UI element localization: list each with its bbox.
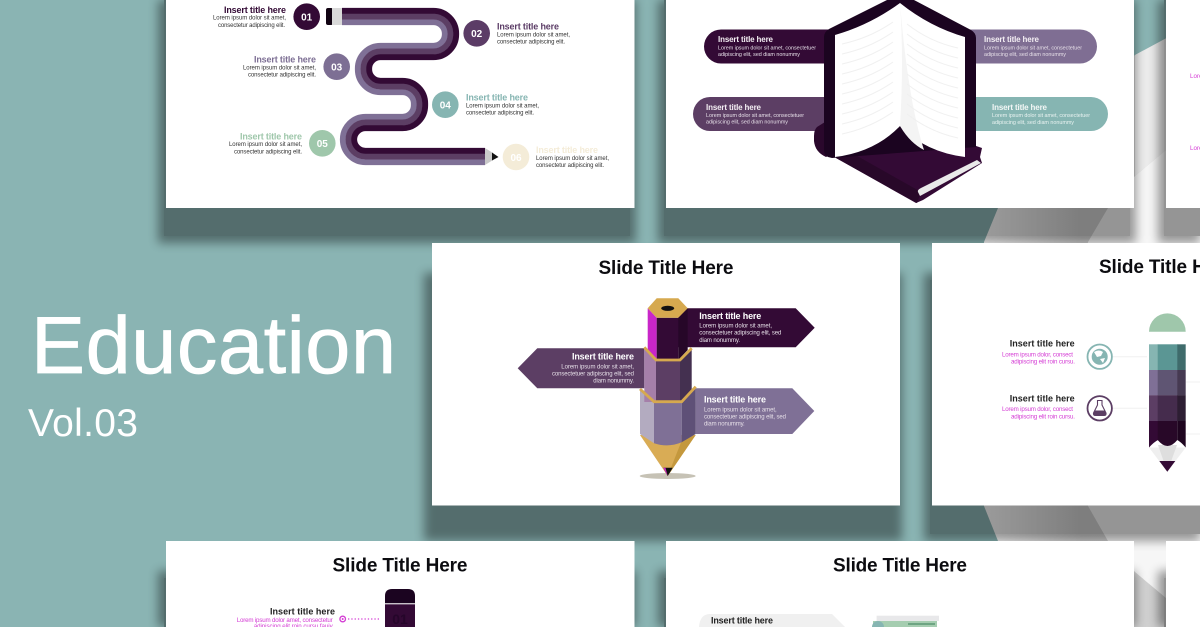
pill 4	[960, 97, 1108, 131]
pill 4: Lorem ipsum dolor sit amet, consectetuer	[992, 113, 1090, 119]
pill 4: Insert title here	[992, 103, 1048, 112]
panel: striped pencil slide	[932, 243, 1200, 506]
panel: snake pencil slide	[166, 0, 634, 208]
step 02	[463, 20, 570, 47]
arrow sign bottom right: Insert title here	[704, 395, 766, 405]
step 06: Insert title here	[536, 145, 598, 155]
pencil tip	[485, 148, 498, 165]
step 04	[432, 91, 539, 118]
arrow sign left: Lorem ipsum dolor sit amet,	[561, 364, 634, 370]
step 05: Lorem ipsum dolor sit amet,	[229, 142, 302, 148]
arrow sign top right: consectetuer adipiscing elit, sed	[699, 331, 781, 337]
pill 3: Lorem ipsum dolor sit amet, consectetuer	[706, 113, 804, 119]
step 06	[503, 144, 609, 170]
grey label pill	[699, 614, 845, 627]
step 05: 05	[317, 139, 328, 150]
pill 2: adipiscing elit, sed diam nonummy	[984, 52, 1066, 58]
item text: Insert title here	[270, 606, 335, 616]
arrow sign left: consectetuer adipiscing elit, sed	[552, 372, 634, 378]
item text 2	[1002, 393, 1075, 420]
step 03: 03	[331, 62, 343, 74]
step 04: Lorem ipsum dolor sit amet,	[466, 104, 539, 110]
slide title: Slide Title Here	[833, 556, 967, 577]
pill 2	[960, 30, 1097, 64]
arrow sign top right: Insert title here	[699, 311, 761, 321]
pill 3: adipiscing elit, sed diam nonummy	[706, 120, 788, 126]
pencil eraser	[326, 8, 342, 25]
arrow sign left: Insert title here	[572, 352, 634, 362]
snake pencil body	[342, 11, 485, 162]
connector lines	[1113, 357, 1200, 434]
step 06: Lorem ipsum dolor sit amet,	[536, 156, 609, 162]
main title	[28, 301, 396, 445]
step 03	[243, 53, 350, 80]
item text	[237, 606, 335, 627]
item text 1: Lorem ipsum dolor, consect	[1002, 351, 1073, 358]
panel: open book slide	[666, 0, 1134, 208]
item text 1: Insert title here	[1010, 339, 1075, 349]
icon: flask	[1088, 396, 1112, 420]
step 02: 02	[471, 29, 483, 40]
item text 1: adipiscing elit roin cursu.	[1011, 359, 1075, 366]
bullet marker and dotted connector	[340, 616, 380, 622]
arrow sign bottom right: diam nonummy.	[704, 421, 745, 427]
pill 1: Insert title here	[718, 35, 774, 44]
step 03: Insert title here	[254, 54, 316, 64]
pill 1	[704, 30, 840, 64]
arrow sign bottom right: consectetuer adipiscing elit, sed	[704, 414, 786, 420]
step 03: consectetur adipiscing elit.	[248, 72, 316, 78]
step 06: consectetur adipiscing elit.	[536, 163, 604, 169]
step 05: consectetur adipiscing elit.	[234, 149, 302, 155]
arrow sign left	[518, 348, 644, 388]
panel: pencil signpost slide	[432, 243, 900, 506]
arrow sign top right	[678, 308, 815, 347]
volume label: Vol.03	[28, 402, 138, 445]
slide title: Slide Title Here	[332, 556, 468, 577]
panel: bottom right slide	[1166, 541, 1200, 627]
icon: globe	[1088, 344, 1112, 369]
step 04: consectetur adipiscing elit.	[466, 111, 534, 117]
arrow sign left: diam nonummy.	[593, 379, 634, 385]
book stack icon	[872, 616, 939, 627]
item text 1	[1002, 339, 1075, 366]
main title: Education	[31, 301, 396, 391]
pill 1: Lorem ipsum dolor sit amet, consectetuer	[718, 46, 816, 52]
arrow sign top right: diam nonummy.	[699, 338, 740, 344]
arrow sign bottom right	[696, 388, 814, 434]
book page lines	[842, 22, 958, 138]
item text 2: Lorem ipsum dolor, consect	[1002, 406, 1073, 413]
panel: bottom left slide	[166, 541, 634, 627]
pill 4: adipiscing elit, sed diam nonummy	[992, 120, 1074, 126]
pill 1: adipiscing elit, sed diam nonummy	[718, 52, 800, 58]
item text 2: adipiscing elit roin cursu.	[1011, 413, 1075, 420]
step 04: 04	[440, 100, 451, 112]
pill 2: Lorem ipsum dolor sit amet, consectetuer	[984, 46, 1082, 52]
arrow sign bottom right: Lorem ipsum dolor sit amet,	[704, 407, 777, 413]
slide title: Slide Title Here	[598, 258, 734, 279]
step 01	[213, 3, 320, 30]
grey label pill: Insert title here	[711, 616, 773, 626]
signpost pencil	[640, 298, 696, 479]
step 02: consectetur adipiscing elit.	[497, 40, 565, 46]
step 06: 06	[510, 153, 522, 164]
step 02: Insert title here	[497, 22, 559, 32]
step 01: Lorem ipsum dolor sit amet,	[213, 16, 286, 22]
item text 2: Insert title here	[1010, 393, 1075, 403]
step 03: Lorem ipsum dolor sit amet,	[243, 66, 316, 72]
arrow sign top right: Lorem ipsum dolor sit amet,	[699, 323, 772, 329]
step 01: consectetur adipiscing elit.	[218, 23, 285, 29]
pill 3	[693, 97, 840, 131]
step 02: Lorem ipsum dolor sit amet,	[497, 33, 570, 39]
step 05	[229, 130, 336, 157]
step 01: 01	[301, 12, 313, 24]
step 04: Insert title here	[466, 92, 528, 102]
striped pencil	[1149, 313, 1186, 472]
step 05: Insert title here	[240, 132, 302, 142]
pill 2: Insert title here	[984, 35, 1040, 44]
icon: open book	[814, 0, 982, 203]
panel: bottom middle slide	[666, 541, 1134, 627]
panel: far right top slide	[1166, 0, 1200, 208]
numbered pencil	[385, 589, 415, 627]
numbered pencil: 01	[392, 611, 408, 627]
item text: Lorem ipsum dolor amet, consectetur	[237, 617, 333, 624]
pill 3: Insert title here	[706, 103, 762, 112]
step 01: Insert title here	[224, 5, 286, 15]
